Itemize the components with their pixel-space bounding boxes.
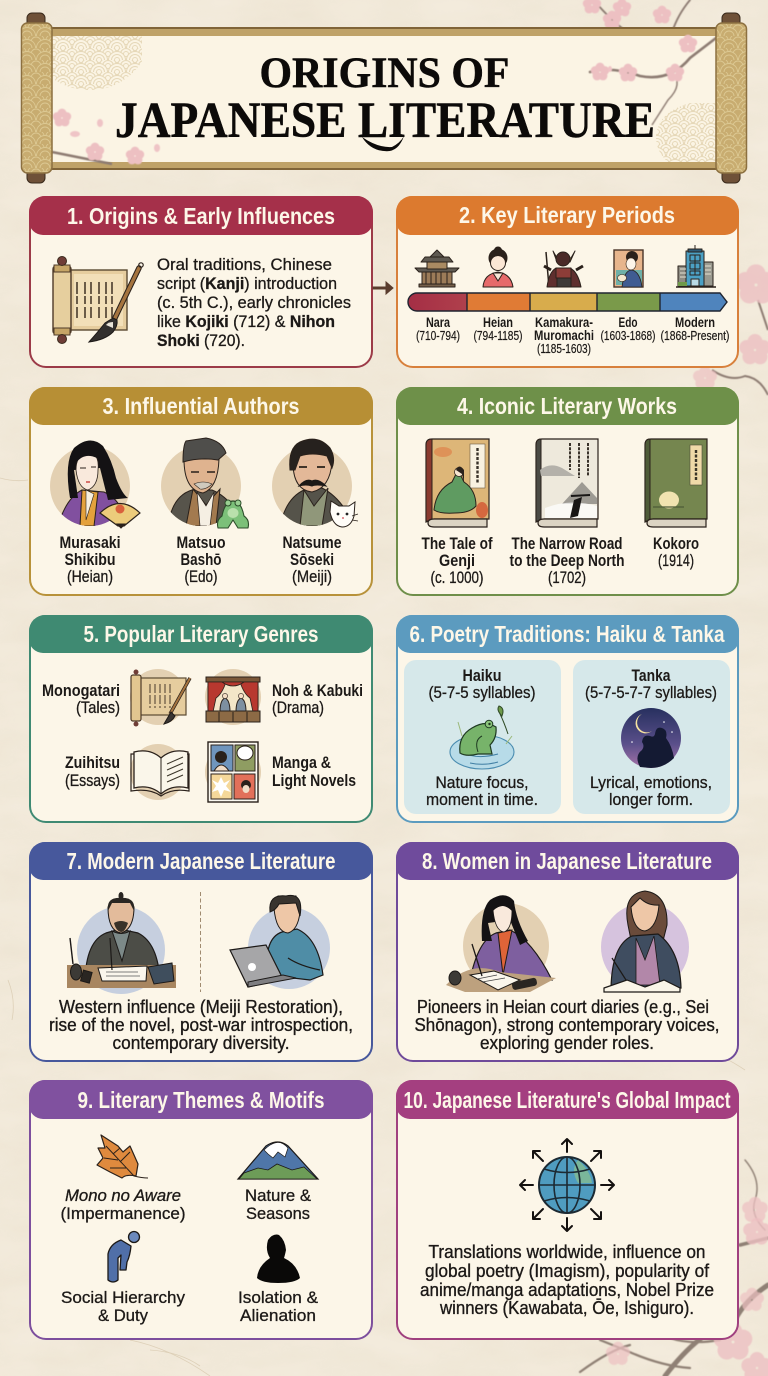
cherry branch: top right [583,0,690,70]
panel header [29,387,373,425]
panel header [396,387,739,425]
icon: contemporary woman with book [601,891,689,992]
panel 3: influential authors [29,387,373,595]
panel 9: literary themes and motifs [29,1080,373,1339]
author names: Matsuo [176,533,226,552]
theme label: isolation [238,1288,319,1325]
panel 2: key literary periods [396,196,739,367]
text block [414,997,720,1053]
book titles [422,534,699,587]
haiku text [426,773,538,809]
author names [60,533,342,586]
text block: Pioneers in Heian court diaries (e.g., Sei [417,997,709,1017]
theme label: isolation: Isolation & [238,1288,319,1307]
genre labels: tales and drama: (Tales) [76,698,120,717]
icon: fan [100,504,140,528]
timeline bar [408,293,727,311]
panel header [29,615,373,653]
tanka text [590,773,712,809]
heading: 2. Key Literary Periods [459,202,675,228]
book titles: The Tale of [422,534,493,553]
text block: script (Kanji) introduction [157,274,337,293]
title text: ORIGINS OF [260,50,510,97]
icon: ukiyo-e print [614,250,643,287]
genre labels: tales and drama: (Drama) [272,698,324,717]
panel header [29,1080,373,1119]
heading: 1. Origins & Early Influences [67,203,335,229]
left roller [22,13,52,183]
theme label: hierarchy [61,1288,185,1325]
tanka text: longer form. [609,790,693,809]
arrow from panel 1 to panel 2 [373,282,393,294]
panel body [30,616,372,822]
icon: mount fuji [238,1142,318,1179]
theme label: hierarchy: & Duty [98,1306,148,1325]
panel body [30,1081,372,1339]
theme label: nature: Seasons [246,1204,310,1223]
author: Natsume Soseki [272,439,358,527]
text block: contemporary diversity. [112,1033,290,1053]
author: Matsuo Basho [161,438,248,528]
timeline labels: (1185-1603) [537,342,591,356]
timeline labels: (1603-1868) [600,329,656,343]
panel 10: global impact [396,1080,739,1339]
panel 5: popular literary genres [29,615,373,822]
icon: manga page [205,742,261,802]
icon: samurai armor [544,251,583,287]
icon: autumn leaf [97,1135,148,1178]
book: Kokoro [645,439,707,527]
icon: theatre stage [205,669,261,725]
theme label: impermanence: (Impermanence) [60,1204,186,1223]
icon: heian woman [483,247,513,287]
card: tanka [573,660,730,814]
book titles: (1702) [548,568,586,587]
title text: JAPANESE LITERATURE [115,93,655,149]
haiku heading: Haiku [462,666,502,685]
icon: genre scroll [130,669,190,726]
title text [115,50,655,151]
seigaiha decorations [52,36,144,92]
heading: 5. Popular Literary Genres [84,621,318,647]
book: The Narrow Road to the Deep North [536,439,598,527]
icon: globe with radiating arrows [520,1139,614,1231]
cherry branch: right middle [693,264,768,395]
theme label: impermanence: Mono no Aware [65,1186,181,1205]
panel body [397,197,738,367]
author names: Natsume [282,533,342,552]
panel header [396,615,739,653]
panel header [396,842,739,880]
icon: frog on pond [450,706,514,769]
genre labels: essays and manga [65,753,356,790]
author names: (Meiji) [292,567,332,586]
genre labels: essays and manga: Zuihitsu [65,753,120,772]
tanka heading: (5-7-5-7-7 syllables) [585,683,717,702]
timeline labels: (794-1185) [474,329,522,343]
right roller [716,13,746,183]
panel body [30,843,372,1061]
panel body [397,388,738,595]
icon: scroll and brush [53,256,143,344]
timeline labels: Modern [675,315,715,330]
panel body [30,197,372,367]
panel header [396,196,739,235]
cherry blossoms on scroll [52,35,716,164]
heading: 9. Literary Themes & Motifs [78,1087,324,1113]
icon: night couple [621,708,681,768]
panel body [30,388,372,595]
author names: (Edo) [184,567,218,586]
panel header [29,196,373,235]
book: The Tale of Genji [426,439,489,527]
text block: Shoki (720). [157,331,245,350]
heading: 4. Iconic Literary Works [457,393,677,419]
tanka text: Lyrical, emotions, [590,773,712,792]
genre labels: tales and drama [42,681,363,717]
text block: global poetry (Imagism), popularity of [425,1261,710,1281]
author: Murasaki Shikibu [50,440,140,528]
card: haiku [404,660,561,814]
panel body [397,843,738,1061]
haiku heading: (5-7-5 syllables) [428,683,536,702]
timeline labels: Edo [618,315,638,330]
icon: bowing figure [108,1232,140,1282]
text block [157,255,351,350]
panel header [29,842,373,880]
timeline labels: Muromachi [534,328,594,343]
haiku text: moment in time. [426,790,538,809]
icon: pagoda [415,250,459,287]
divider [200,892,202,992]
title scroll banner [22,13,746,183]
haiku text: Nature focus, [436,773,528,792]
heading: 3. Influential Authors [102,393,300,419]
timeline labels: Kamakura- [535,315,593,330]
panel body [397,1081,738,1339]
author names: Murasaki [60,533,120,552]
scroll paper [50,27,718,170]
book titles: The Narrow Road [512,534,622,553]
icon: modern writer with laptop [230,895,330,989]
panel 6: poetry traditions [396,615,739,822]
icon: frog [218,500,248,528]
icon: modern buildings [676,245,716,287]
author names: (Heian) [67,567,113,586]
theme label: hierarchy: Social Hierarchy [61,1288,185,1307]
theme label: isolation: Alienation [240,1306,316,1325]
text block: Shōnagon), strong contemporary voices, [414,1015,720,1035]
author names: Bashō [180,550,222,569]
text block [49,997,353,1053]
timeline labels: (710-794) [416,329,460,343]
icon: open book [130,744,189,800]
tanka heading: Tanka [632,666,671,685]
text block: exploring gender roles. [480,1033,654,1053]
panel 1: origins and early influences [29,196,373,367]
genre labels: tales and drama: Noh & Kabuki [272,681,363,700]
timeline labels [416,315,730,356]
haiku heading [428,666,536,702]
author names: Sōseki [290,550,334,569]
timeline labels: Heian [483,315,513,330]
icon: meiji writer at desk [67,892,176,994]
icon: heian woman writing [446,895,556,992]
text block: Western influence (Meiji Restoration), [59,997,343,1017]
text block: rise of the novel, post-war introspection, [49,1015,353,1035]
text block: winners (Kawabata, Ōe, Ishiguro). [439,1298,694,1318]
book titles: to the Deep North [510,551,624,570]
theme label: nature: Nature & [245,1186,312,1205]
text block: Oral traditions, Chinese [157,255,332,274]
book titles: Kokoro [653,534,699,553]
text block: (c. 5th C.), early chronicles [157,293,351,312]
panel 7: modern japanese literature [29,842,373,1061]
text block: anime/manga adaptations, Nobel Prize [420,1280,714,1300]
theme label: impermanence [60,1186,186,1223]
theme label: nature [245,1186,312,1223]
book titles: (1914) [658,551,694,570]
panel header [396,1080,739,1119]
panel 8: women in japanese literature [396,842,739,1061]
cherry branch: bottom right [580,1160,768,1376]
icon: white cat [330,501,358,527]
genre labels: essays and manga: Light Novels [272,771,356,790]
timeline labels: Nara [426,315,450,330]
genre labels: essays and manga: Manga & [272,753,331,772]
tanka heading [585,666,717,702]
text block: Translations worldwide, influence on [428,1242,706,1262]
heading: 7. Modern Japanese Literature [66,848,336,874]
book titles: Genji [439,551,475,570]
panel 4: iconic literary works [396,387,739,595]
book titles: (c. 1000) [430,568,484,587]
icon: lone silhouette [257,1235,300,1283]
text block: like Kojiki (712) & Nihon [157,312,335,331]
author names: Shikibu [64,550,116,569]
text block [420,1242,714,1318]
genre labels: essays and manga: (Essays) [65,771,120,790]
panel body [397,616,738,822]
genre labels: tales and drama: Monogatari [42,681,120,700]
timeline labels: (1868-Present) [660,329,730,343]
